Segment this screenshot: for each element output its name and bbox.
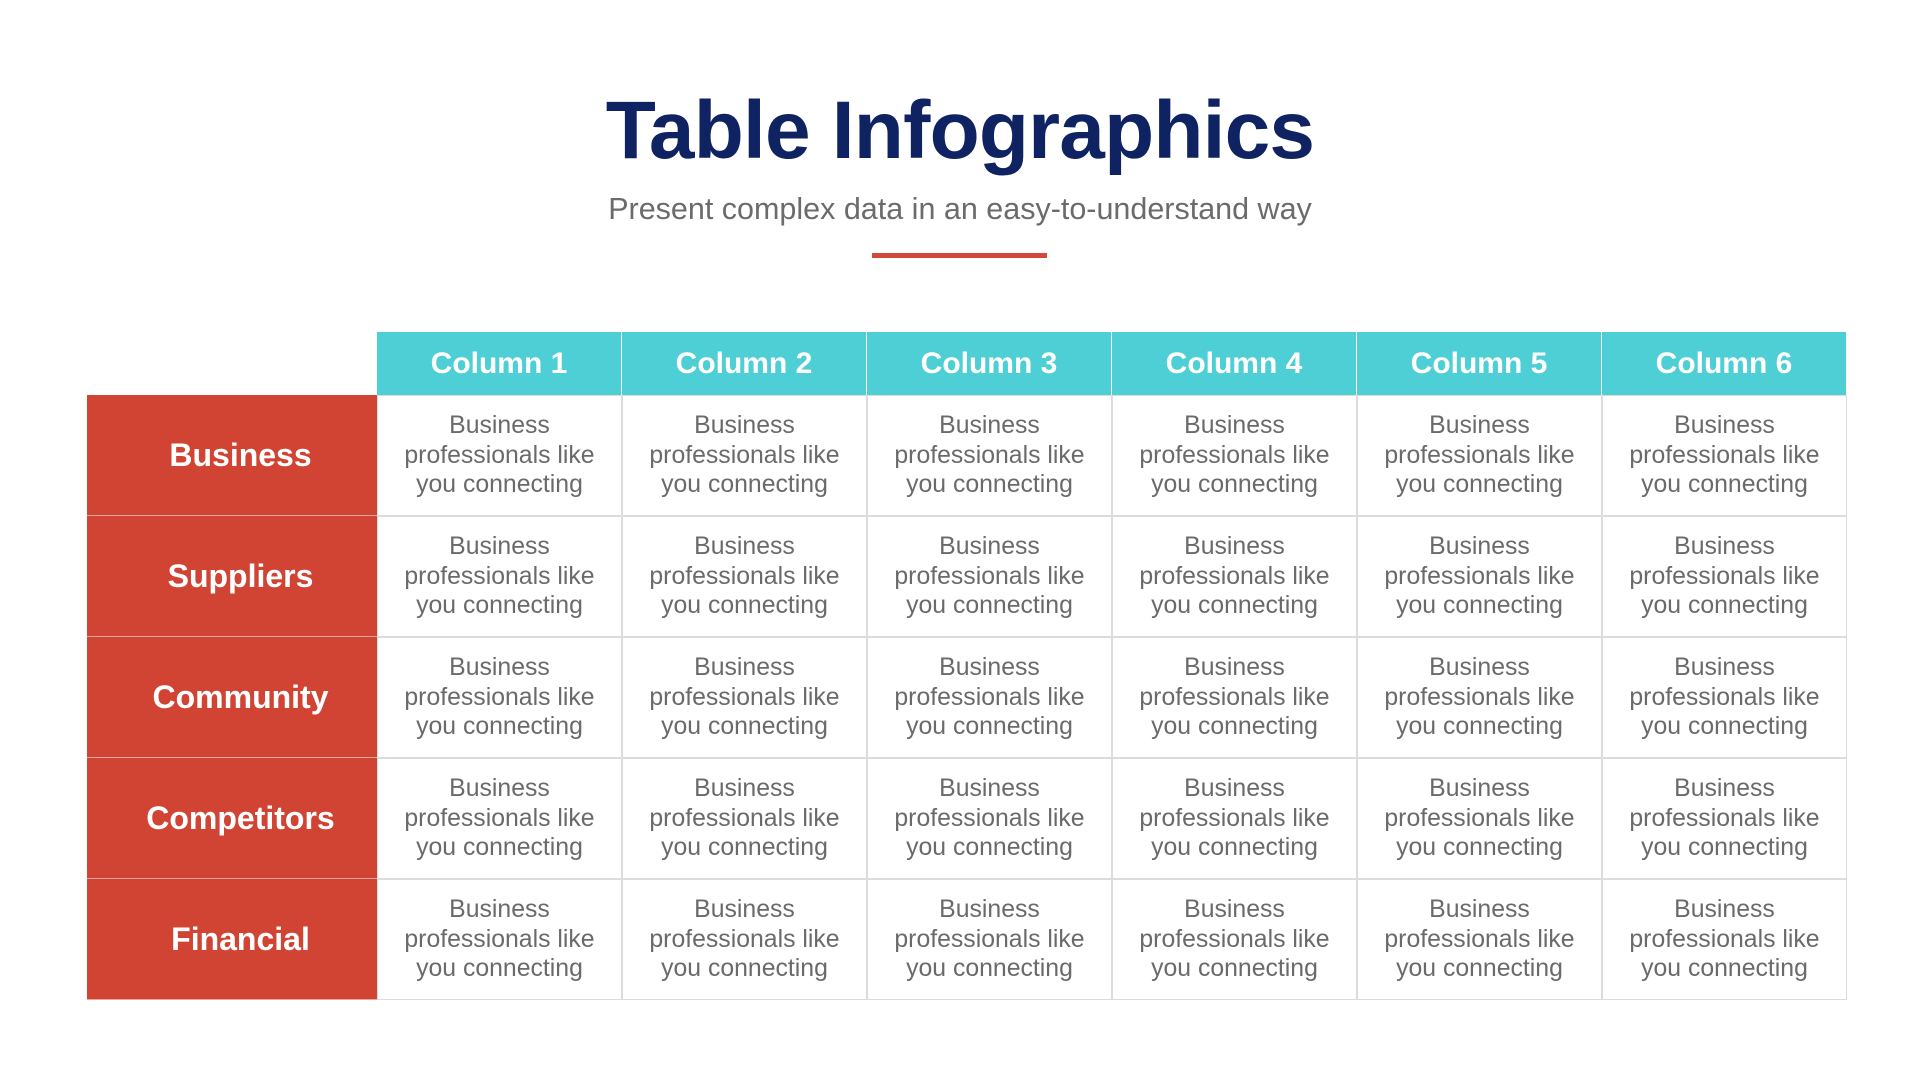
cells grid: Business — [694, 775, 795, 802]
header: Column 6: Column 6 — [1656, 346, 1792, 380]
row label: Suppliers — [87, 516, 377, 637]
header: Column 3: Column 3 — [921, 346, 1057, 380]
cells grid: professionals like — [649, 926, 840, 953]
cells grid: professionals like — [404, 442, 595, 469]
cells grid: you connecting — [661, 471, 828, 498]
cells grid: professionals like — [1629, 805, 1820, 832]
row label: Community — [87, 637, 377, 758]
cells grid: professionals like — [894, 805, 1085, 832]
cells grid: professionals like — [894, 684, 1085, 711]
row label: Financial: Financial — [171, 920, 310, 956]
cells grid: professionals like — [1384, 926, 1575, 953]
cells grid: you connecting — [906, 471, 1073, 498]
cells grid: professionals like — [1629, 563, 1820, 590]
cells grid: Business — [1184, 896, 1285, 923]
cells grid: Business — [939, 412, 1040, 439]
cells grid: professionals like — [1139, 563, 1330, 590]
cells grid: you connecting — [1396, 713, 1563, 740]
cells grid: Business — [1674, 896, 1775, 923]
cells grid: professionals like — [1384, 442, 1575, 469]
cells grid: professionals like — [1629, 684, 1820, 711]
cells grid: you connecting — [906, 955, 1073, 982]
cells grid: Business — [1429, 533, 1530, 560]
cells grid: professionals like — [1384, 563, 1575, 590]
cells grid: professionals like — [894, 926, 1085, 953]
cells grid: professionals like — [404, 805, 595, 832]
cells grid: professionals like — [1629, 926, 1820, 953]
cells grid: Business — [939, 775, 1040, 802]
cells grid: Business — [449, 654, 550, 681]
cells grid: you connecting — [661, 955, 828, 982]
cells grid: you connecting — [1641, 713, 1808, 740]
cells grid: professionals like — [404, 926, 595, 953]
table — [87, 332, 1847, 1000]
cells grid: you connecting — [906, 592, 1073, 619]
header: Column 6 — [1602, 332, 1846, 395]
cells grid: Business — [1429, 412, 1530, 439]
cells grid: Business — [694, 533, 795, 560]
header: Column 2 — [622, 332, 867, 395]
cells grid: you connecting — [416, 592, 583, 619]
cells grid: you connecting — [661, 713, 828, 740]
cells grid: Business — [939, 896, 1040, 923]
title: Table Infographics — [606, 85, 1314, 176]
row label: Business — [87, 395, 377, 516]
cells grid: Business — [1429, 654, 1530, 681]
cells grid: professionals like — [894, 563, 1085, 590]
cells grid: professionals like — [1384, 684, 1575, 711]
cells grid: you connecting — [416, 955, 583, 982]
header: Column 5: Column 5 — [1411, 346, 1547, 380]
cells grid: you connecting — [416, 713, 583, 740]
cells grid: Business — [449, 896, 550, 923]
row label: Financial — [87, 879, 377, 1000]
cells grid: you connecting — [1151, 471, 1318, 498]
cells grid: professionals like — [1139, 926, 1330, 953]
cells grid: you connecting — [1151, 834, 1318, 861]
cells grid: Business — [694, 654, 795, 681]
cells grid: professionals like — [649, 563, 840, 590]
cells grid: you connecting — [661, 834, 828, 861]
cells grid: Business — [449, 775, 550, 802]
cells grid: Business — [1429, 896, 1530, 923]
header: Column 4 — [1112, 332, 1357, 395]
row label: Community: Community — [152, 678, 328, 714]
header: Column 5 — [1357, 332, 1602, 395]
cells grid: you connecting — [1641, 471, 1808, 498]
cells grid: you connecting — [1396, 592, 1563, 619]
cells grid: professionals like — [1139, 684, 1330, 711]
subtitle: Present complex data in an easy-to-understand way — [608, 192, 1312, 226]
cells grid: Business — [1674, 654, 1775, 681]
cells grid: professionals like — [1384, 805, 1575, 832]
cells grid: you connecting — [1396, 955, 1563, 982]
header: Column 4: Column 4 — [1166, 346, 1302, 380]
cells grid: you connecting — [416, 834, 583, 861]
cells grid: professionals like — [1139, 805, 1330, 832]
cells grid: Business — [694, 896, 795, 923]
cells grid: you connecting — [661, 592, 828, 619]
cells grid: professionals like — [649, 805, 840, 832]
cells grid: Business — [939, 654, 1040, 681]
cells grid: you connecting — [1151, 955, 1318, 982]
cells grid: you connecting — [1396, 834, 1563, 861]
header: Column 1: Column 1 — [431, 346, 567, 380]
cells grid: you connecting — [906, 713, 1073, 740]
cells grid: Business — [1184, 775, 1285, 802]
cells grid: professionals like — [1629, 442, 1820, 469]
cells grid: you connecting — [416, 471, 583, 498]
row label: Competitors: Competitors — [146, 800, 335, 836]
cells grid: Business — [1429, 775, 1530, 802]
cells grid: you connecting — [1641, 834, 1808, 861]
row label: Competitors — [87, 758, 377, 879]
cells grid: professionals like — [404, 684, 595, 711]
header: Column 1 — [377, 332, 622, 395]
cells grid: Business — [1184, 533, 1285, 560]
cells grid: Business — [1674, 775, 1775, 802]
cells grid: you connecting — [1396, 471, 1563, 498]
cells grid: Business — [1184, 412, 1285, 439]
cells grid: professionals like — [1139, 442, 1330, 469]
accent line — [872, 253, 1047, 258]
cells grid: you connecting — [1641, 955, 1808, 982]
cells grid: professionals like — [404, 563, 595, 590]
header: Column 2: Column 2 — [676, 346, 812, 380]
cells grid: professionals like — [649, 684, 840, 711]
cells grid: Business — [1674, 533, 1775, 560]
cells grid: Business — [449, 412, 550, 439]
cells grid: Business — [939, 533, 1040, 560]
cells grid: Business — [1184, 654, 1285, 681]
cells grid: you connecting — [1151, 592, 1318, 619]
cells grid: Business — [1674, 412, 1775, 439]
cells grid: Business — [694, 412, 795, 439]
cells grid — [377, 395, 1847, 1000]
cells grid: you connecting — [906, 834, 1073, 861]
cells grid: professionals like — [894, 442, 1085, 469]
cells grid: you connecting — [1641, 592, 1808, 619]
cells grid: professionals like — [649, 442, 840, 469]
cells grid: Business — [449, 533, 550, 560]
row label: Business: Business — [169, 436, 312, 472]
header: Column 3 — [867, 332, 1112, 395]
row label: Suppliers: Suppliers — [168, 558, 313, 594]
cells grid: you connecting — [1151, 713, 1318, 740]
